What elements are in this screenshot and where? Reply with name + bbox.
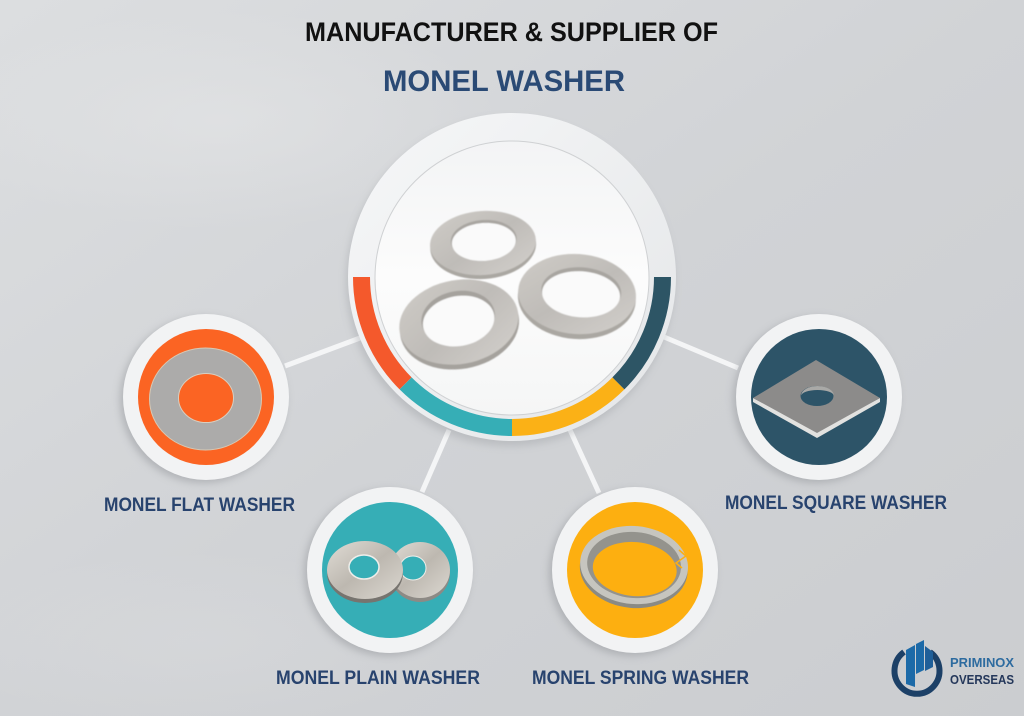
node: spring washer [549,487,718,656]
label: square washer: MONEL SQUARE WASHER [725,493,947,514]
logo icon [895,640,940,694]
connector: square washer [664,337,738,368]
ring segment: dark teal [612,277,671,389]
plain washer: front [327,543,403,603]
title: MANUFACTURER & SUPPLIER OF [305,17,718,47]
subtitle: MONEL WASHER [383,65,625,98]
node: square washer [733,314,902,483]
node: flat washer [120,314,289,483]
label: flat washer: MONEL FLAT WASHER [104,495,295,516]
ring segment: orange [353,277,412,389]
plain washer: back [390,544,450,602]
node: plain washer [304,487,473,656]
logo [895,640,1014,694]
connector: plain washer [422,430,449,492]
connector: flat washer [285,338,360,366]
ring segment: yellow [512,377,624,436]
flat washer [150,348,262,450]
main washer: top [428,207,538,283]
logo: OVERSEAS [950,672,1014,687]
main washer: right [515,250,639,343]
spring washer [577,521,691,613]
label: spring washer: MONEL SPRING WASHER [532,668,749,689]
label: plain washer: MONEL PLAIN WASHER [276,668,480,689]
main washer: left [392,270,526,379]
ring segment: teal [400,377,512,436]
central circle [346,113,676,446]
logo text: PRIMINOX [950,655,1014,670]
connector: spring washer [570,430,599,493]
square washer [753,398,880,438]
